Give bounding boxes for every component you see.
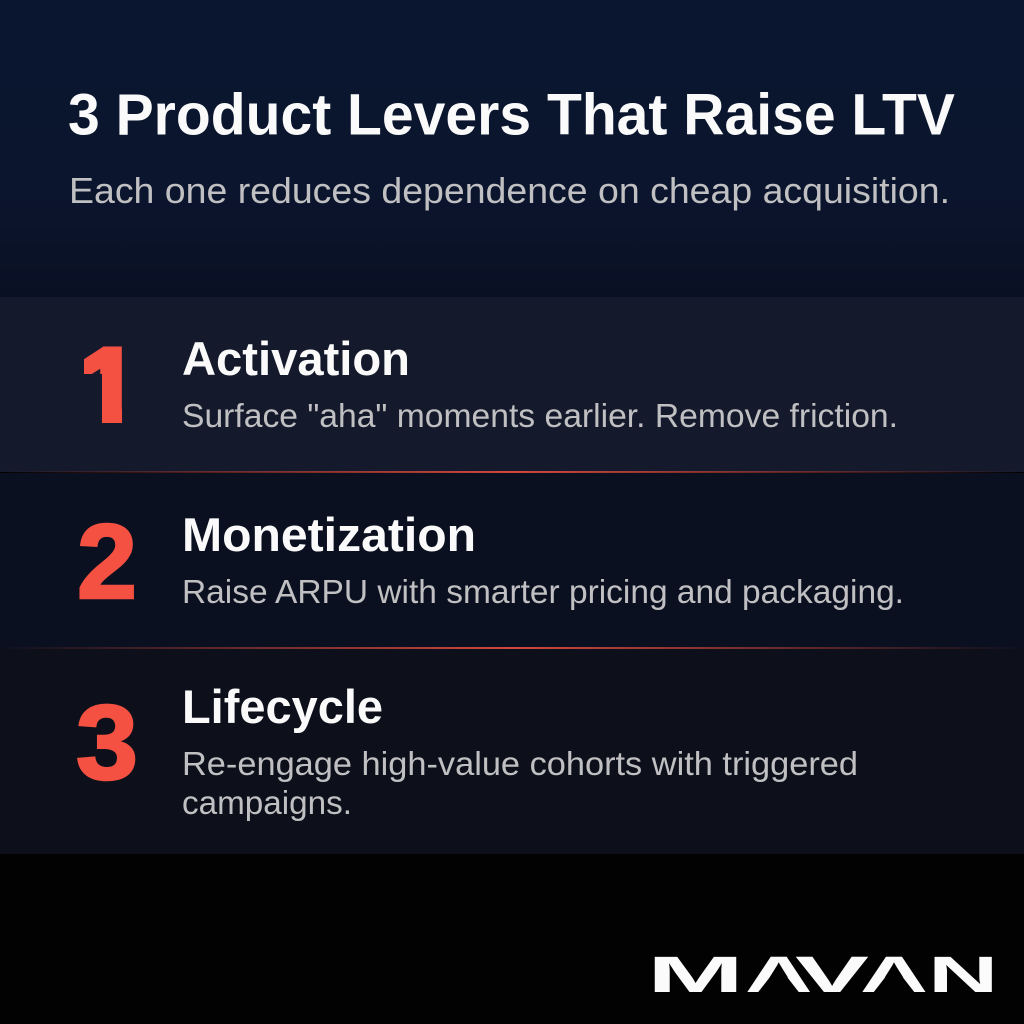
header panel: [0, 0, 1024, 297]
panel: monetization: [0, 473, 1024, 648]
body: lifecycle: campaigns.: [182, 784, 352, 821]
heading: activation: Activation: [182, 332, 410, 385]
number 2: 2: [77, 503, 137, 621]
heading: monetization: Monetization: [182, 508, 476, 561]
logo: MAVAN: A: [745, 946, 812, 1003]
logo: MAVAN: [647, 946, 998, 1003]
number 1: 1: [79, 328, 138, 446]
logo: MAVAN: V: [795, 946, 869, 1003]
title: 3 Product Levers That Raise LTV: [68, 82, 955, 148]
logo: MAVAN: M: [647, 946, 744, 1003]
body: monetization: Raise ARPU with smarter pricing and packaging.: [182, 573, 904, 610]
panel: lifecycle: [0, 648, 1024, 854]
subtitle: Each one reduces dependence on cheap acquisition.: [69, 170, 950, 211]
number 3: 3: [76, 684, 138, 802]
body: lifecycle: Re-engage high-value cohorts with triggered: [182, 745, 858, 782]
panel: activation: [0, 297, 1024, 472]
logo: MAVAN: N: [928, 946, 998, 1003]
body: activation: Surface "aha" moments earlier. Remove friction.: [182, 397, 898, 434]
logo: MAVAN: A: [860, 946, 928, 1003]
heading: lifecycle: Lifecycle: [182, 680, 383, 733]
